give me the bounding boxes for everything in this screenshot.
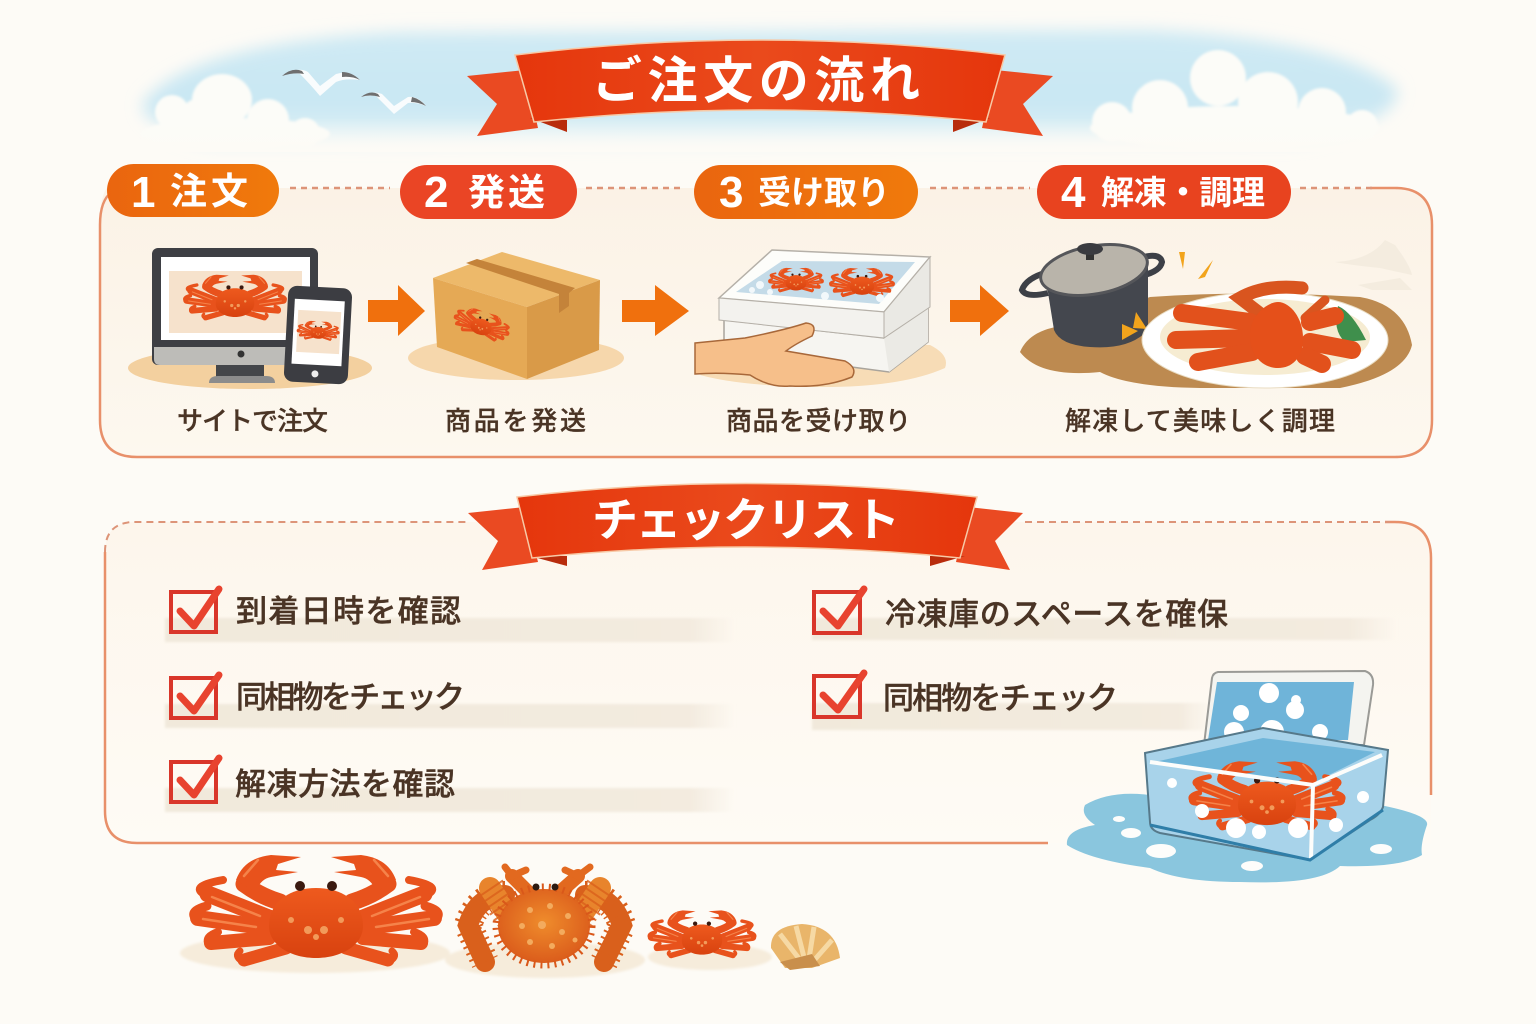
lid	[1204, 671, 1373, 745]
checklist item 3	[171, 758, 455, 802]
icon: small crab	[649, 910, 755, 956]
step pill 4: 4	[1061, 168, 1086, 217]
step pill 1: 1	[131, 168, 155, 217]
step pill 1: 注文	[170, 171, 248, 212]
icon: cooking pot and plated crab	[1020, 237, 1412, 388]
title ribbon	[467, 40, 1053, 136]
glass box	[1145, 728, 1388, 860]
icon: monitor and phone	[128, 248, 372, 389]
checklist ribbon	[468, 484, 1023, 570]
decoration: steam	[1335, 240, 1412, 290]
checklist item 2: 同相物をチェック	[236, 680, 465, 715]
panel: checklist	[105, 522, 1431, 843]
title text: ご注文の流れ	[592, 53, 920, 109]
step pill 1	[107, 164, 279, 217]
step pill 2: 発送	[468, 172, 545, 213]
icon: seagulls	[282, 70, 426, 114]
shadows under seafood	[180, 933, 772, 978]
icon: king crab	[468, 867, 622, 965]
step pill 3	[694, 165, 918, 219]
ribbon band	[515, 40, 1005, 122]
icon: snow crab	[194, 855, 438, 961]
cloud right	[1090, 50, 1380, 150]
water puddle	[1067, 794, 1427, 882]
checklist heading: チェックリスト	[592, 494, 900, 546]
caption: step 2: 商品を発送	[445, 406, 586, 436]
ribbon tail left	[467, 70, 538, 136]
icon: ice box with crab	[1067, 671, 1427, 882]
checklist item 5	[814, 673, 1118, 717]
decoration: sky fade	[100, 118, 1436, 152]
brush strokes	[165, 618, 1397, 812]
checklist item 4	[814, 589, 1228, 633]
checklist item 3: 解凍方法を確認	[235, 767, 455, 802]
checklist item 1: 到着日時を確認	[236, 594, 461, 629]
ribbon tail right	[982, 70, 1053, 136]
arrow 2	[622, 285, 689, 336]
arrow 3	[950, 285, 1009, 336]
step pill 4	[1037, 165, 1291, 219]
ribbon tail left	[468, 507, 538, 570]
checklist item 1	[171, 589, 461, 632]
cloud left	[140, 74, 330, 150]
ribbon band	[517, 484, 977, 558]
caption: step 3: 商品を受け取り	[726, 406, 911, 436]
ribbon folds	[530, 556, 965, 566]
step pill 2	[400, 165, 577, 219]
arrow 1	[368, 285, 425, 336]
icon: cardboard box	[408, 252, 624, 380]
ribbon folds	[530, 118, 990, 132]
checklist item 2	[171, 675, 465, 718]
icon: foam box and hand	[695, 250, 946, 387]
caption: step 4: 解凍して美味しく調理	[1065, 406, 1335, 436]
checklist item 4: 冷凍庫のスペースを確保	[885, 597, 1228, 632]
step pill 4: 解凍・調理	[1101, 174, 1265, 211]
step pill 2: 2	[424, 168, 448, 217]
step pill 3: 受け取り	[758, 174, 890, 211]
sky banner with clouds	[140, 30, 1398, 150]
checklist item 5: 同相物をチェック	[883, 681, 1118, 716]
icon: scallop shell	[771, 924, 840, 970]
panel: order steps	[100, 188, 1432, 457]
caption: step 1: サイトで注文	[177, 406, 328, 436]
step pill 3: 3	[719, 168, 743, 217]
ribbon tail right	[956, 507, 1023, 570]
